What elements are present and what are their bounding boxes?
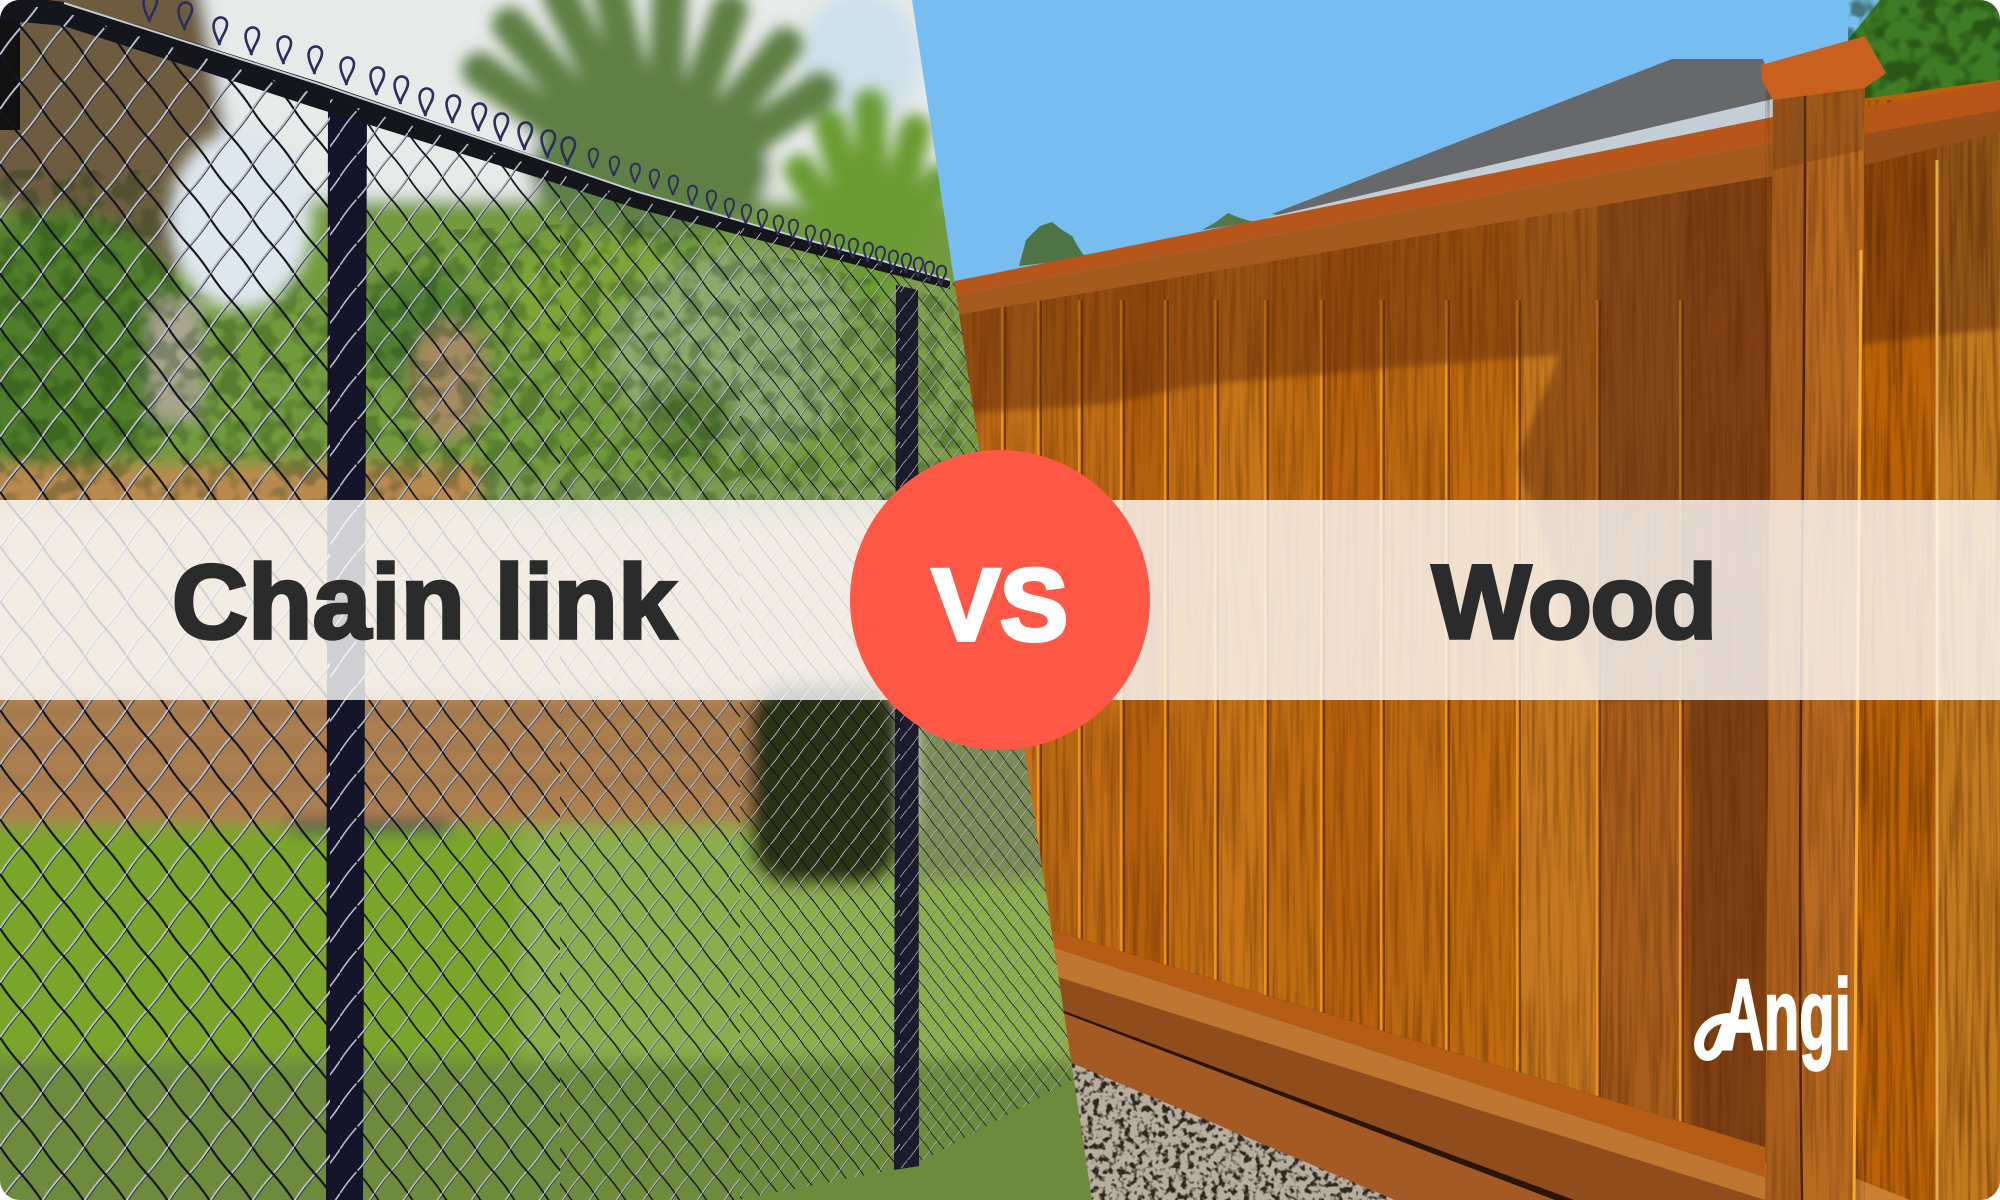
board joints [1002, 300, 1680, 1200]
vs badge [850, 450, 1150, 750]
rail highlight [64, 3, 950, 280]
logo: Angi: Angi [1722, 960, 1851, 1071]
fence post near [326, 100, 367, 1200]
wood grain [960, 178, 1770, 1146]
pale sky gap behind trees [168, 130, 312, 310]
panel right of post [1855, 80, 2000, 1200]
chain link mesh [0, 0, 1110, 1200]
wood post [1765, 80, 1865, 1200]
base board lower [1045, 1006, 1555, 1200]
distant tree [1019, 222, 1086, 266]
base board highlight [1040, 943, 1765, 1200]
corner post [0, 0, 20, 130]
top rail cap [950, 117, 1773, 296]
roof gutter [1265, 98, 1777, 226]
sky [912, 0, 2000, 295]
palm fronds [480, 0, 940, 290]
gravel [1071, 1062, 1394, 1200]
post cap [1761, 36, 1886, 100]
mesh top loops [144, 0, 946, 285]
blurred backdrop [0, 0, 1140, 1200]
base trim [1035, 925, 1765, 1177]
heading: wood: Wood [1432, 544, 1716, 661]
roof [1272, 59, 1777, 218]
foliage mottling [0, 170, 1000, 500]
panel: wood fence photo [880, 0, 2000, 1200]
distant tree small [1202, 213, 1254, 230]
label band [0, 500, 2000, 700]
ground gap shadow [1035, 925, 1765, 1200]
top rail trim [950, 142, 1773, 316]
fence panel boards [959, 176, 1772, 1163]
fence post far [894, 285, 919, 1170]
leaves top right [1848, 0, 2000, 106]
top rail [0, 0, 950, 289]
panel: chain link photo [0, 0, 1140, 1200]
vs badge: VS [932, 548, 1068, 662]
heading: chain link: Chain link [172, 544, 677, 661]
base board middle [1058, 977, 1764, 1200]
sun shadow on boards [930, 165, 1773, 1200]
